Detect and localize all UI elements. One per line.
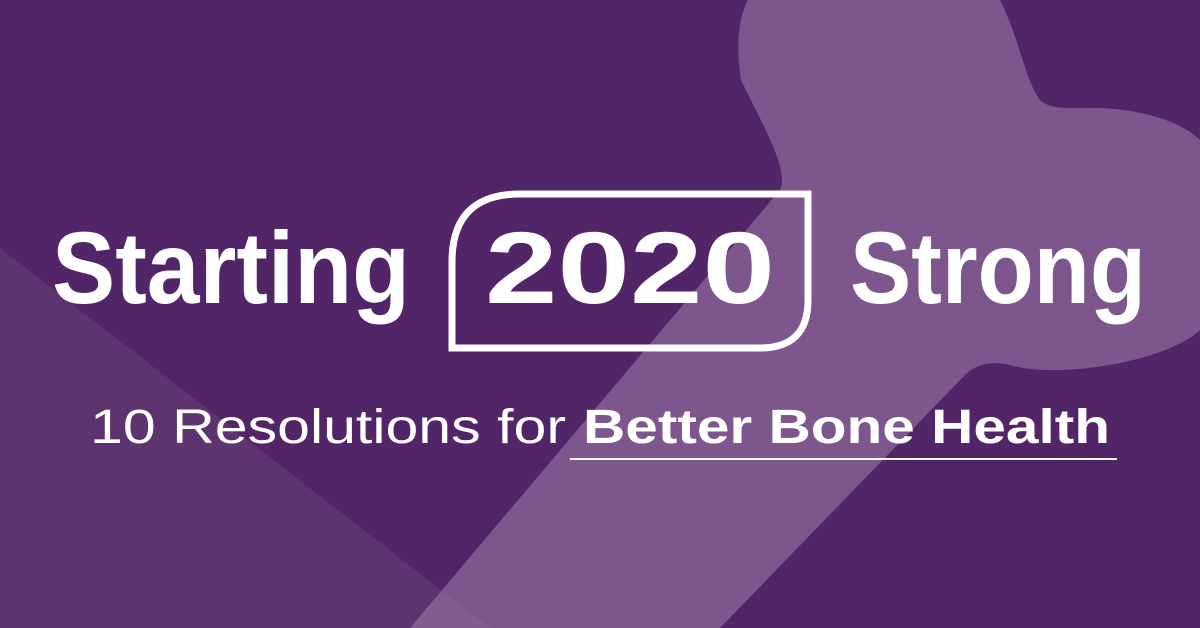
subtitle: 10 Resolutions for [90,401,566,454]
year box: 2020 [485,211,775,325]
background triangle [0,248,490,628]
subtitle [90,401,1117,460]
title: Starting [52,211,410,325]
title [52,194,1146,348]
subtitle: Better Bone Health [583,401,1110,454]
bone shape [410,0,1200,628]
title: Strong [850,211,1146,325]
year box [452,194,808,348]
